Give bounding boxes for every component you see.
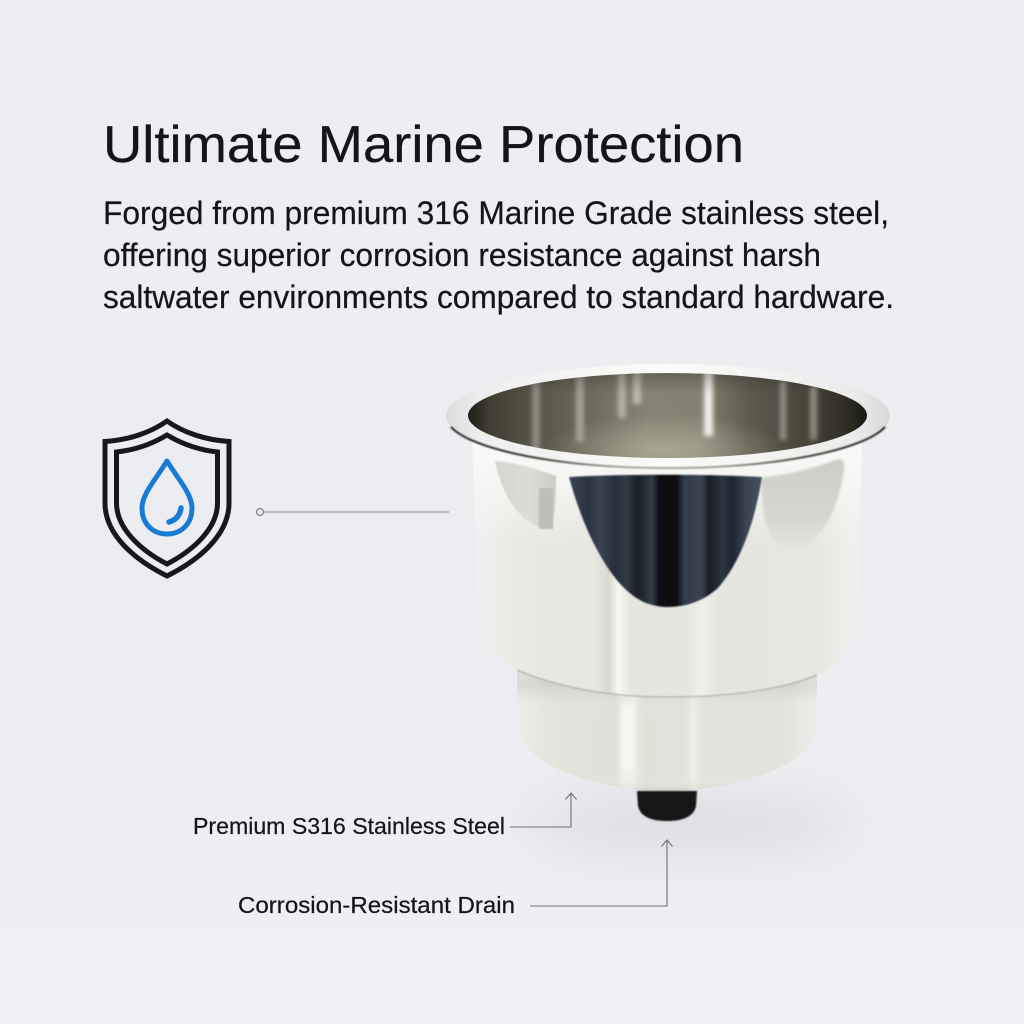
label: Corrosion-Resistant Drain: Corrosion-Resistant Drain (238, 892, 515, 918)
cup lower section (517, 660, 817, 791)
leader line from shield to cup (256, 508, 449, 516)
cup upper section (472, 436, 862, 697)
cup shadow (525, 795, 855, 855)
body text: saltwater environments compared to standard hardware. (103, 279, 894, 315)
label: Corrosion-Resistant Drain (238, 840, 672, 918)
product: stainless steel cup (446, 364, 890, 791)
cup interior (468, 373, 867, 458)
icon: water drop (142, 461, 192, 534)
label: Premium S316 Stainless Steel: Premium S316 Stainless Steel (193, 813, 505, 839)
icon: shield with water drop (105, 421, 229, 576)
label: Premium S316 Stainless Steel (193, 793, 576, 839)
body text (103, 195, 894, 315)
drain plug (637, 791, 697, 821)
cup rim (446, 364, 890, 468)
body text: offering superior corrosion resistance against harsh (103, 237, 821, 273)
reflection: left highlight (495, 461, 556, 529)
reflection: dark centre (569, 475, 762, 607)
title: Ultimate Marine Protection (103, 116, 744, 174)
reflection: right highlight (761, 459, 844, 548)
body text: Forged from premium 316 Marine Grade stainless steel, (103, 195, 889, 231)
